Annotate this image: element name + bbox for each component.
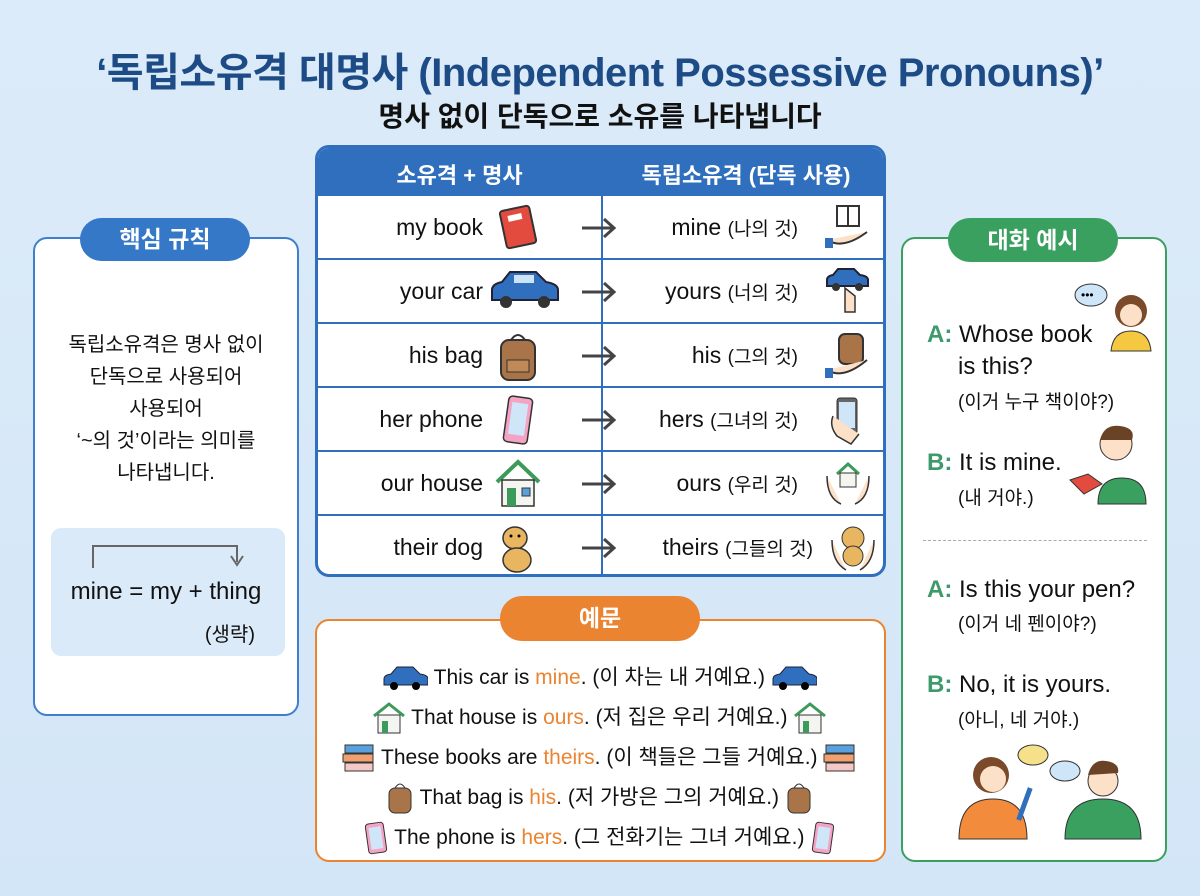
sentence 4 bbox=[388, 784, 810, 814]
row: my book: my book bbox=[396, 214, 483, 240]
dialogue 1 B: B: It is mine. bbox=[927, 449, 1062, 476]
panel: dialogue: (이거 네 펜이야?) bbox=[958, 614, 1097, 635]
row: my book bbox=[318, 194, 883, 258]
row: our house bbox=[318, 450, 883, 514]
row: my book: mine (나의 것) bbox=[671, 214, 798, 240]
sentence 5 bbox=[364, 822, 834, 854]
pill: key rule: 핵심 규칙 bbox=[119, 226, 211, 252]
icon: curved arrow bbox=[92, 545, 244, 568]
divider dashed bbox=[923, 540, 1147, 541]
panel: dialogue: (내 거야.) bbox=[958, 488, 1034, 509]
pill: key rule bbox=[80, 218, 250, 261]
sentence 5: The phone is hers. (그 전화기는 그녀 거예요.) bbox=[394, 826, 804, 849]
row: his bag: his (그의 것) bbox=[692, 342, 798, 368]
sentence 3: These books are theirs. (이 책들은 그들 거예요.) bbox=[381, 746, 818, 769]
subtitle: 명사 없이 단독으로 소유를 나타냅니다 bbox=[378, 101, 822, 132]
panel: table bbox=[315, 145, 886, 577]
row: their dog: theirs (그들의 것) bbox=[662, 534, 813, 560]
icon: boy reading bbox=[1069, 426, 1146, 504]
panel: dialogue: is this? bbox=[958, 353, 1033, 380]
table header: 소유격 + 명사 bbox=[396, 163, 523, 188]
table header: 독립소유격 (단독 사용) bbox=[641, 163, 851, 188]
row: our house: our house bbox=[381, 470, 483, 496]
table header bbox=[318, 148, 883, 194]
pill: examples bbox=[500, 596, 700, 641]
pill: dialogue: 대화 예시 bbox=[987, 227, 1079, 253]
panel: dialogue: (이거 누구 책이야?) bbox=[958, 392, 1114, 413]
rule text: 독립소유격은 명사 없이 bbox=[68, 334, 264, 356]
row: her phone: hers (그녀의 것) bbox=[659, 406, 798, 432]
pill: dialogue bbox=[948, 218, 1118, 262]
dialogue 2 B: B: No, it is yours. bbox=[927, 671, 1111, 698]
rule text bbox=[68, 334, 264, 484]
formula box bbox=[51, 528, 285, 656]
rule text: 사용되어 bbox=[129, 398, 203, 420]
row: her phone bbox=[318, 386, 883, 450]
row: his bag: his bag bbox=[409, 342, 483, 368]
row: his bag bbox=[318, 322, 883, 386]
sentence 1: This car is mine. (이 차는 내 거예요.) bbox=[434, 666, 765, 689]
row: our house: ours (우리 것) bbox=[676, 470, 798, 496]
rule text: 단독으로 사용되어 bbox=[90, 366, 242, 388]
row: your car: your car bbox=[400, 278, 483, 304]
row: her phone: her phone bbox=[379, 406, 483, 432]
pill: examples: 예문 bbox=[579, 605, 621, 631]
sentence 2 bbox=[373, 702, 826, 734]
formula box: (생략) bbox=[205, 624, 255, 646]
dialogue 1 A: A: Whose book bbox=[927, 321, 1092, 348]
row: their dog: their dog bbox=[393, 534, 483, 560]
rule text: 나타냅니다. bbox=[117, 462, 215, 484]
panel: key rule bbox=[33, 237, 299, 716]
row: your car: yours (너의 것) bbox=[665, 278, 798, 304]
row: their dog bbox=[318, 514, 883, 578]
panel: dialogue: (아니, 네 거야.) bbox=[958, 710, 1079, 731]
sentence 4: That bag is his. (저 가방은 그의 거예요.) bbox=[420, 786, 779, 809]
icon: two people talking bbox=[958, 744, 1142, 840]
row: your car bbox=[318, 258, 883, 322]
panel: example sentences bbox=[315, 619, 886, 862]
icon: girl speaking bbox=[1074, 284, 1152, 352]
panel: dialogue bbox=[901, 237, 1167, 862]
formula text: mine = my + thing bbox=[71, 578, 261, 605]
dialogue 2 A: A: Is this your pen? bbox=[927, 576, 1135, 603]
rule text: ‘~의 것’이라는 의미를 bbox=[77, 430, 255, 452]
sentence 2: That house is ours. (저 집은 우리 거예요.) bbox=[411, 706, 787, 729]
title: ‘독립소유격 대명사 (Independent Possessive Pronouns)’ bbox=[96, 51, 1104, 95]
icon: girl speaking: ••• bbox=[1081, 288, 1094, 302]
